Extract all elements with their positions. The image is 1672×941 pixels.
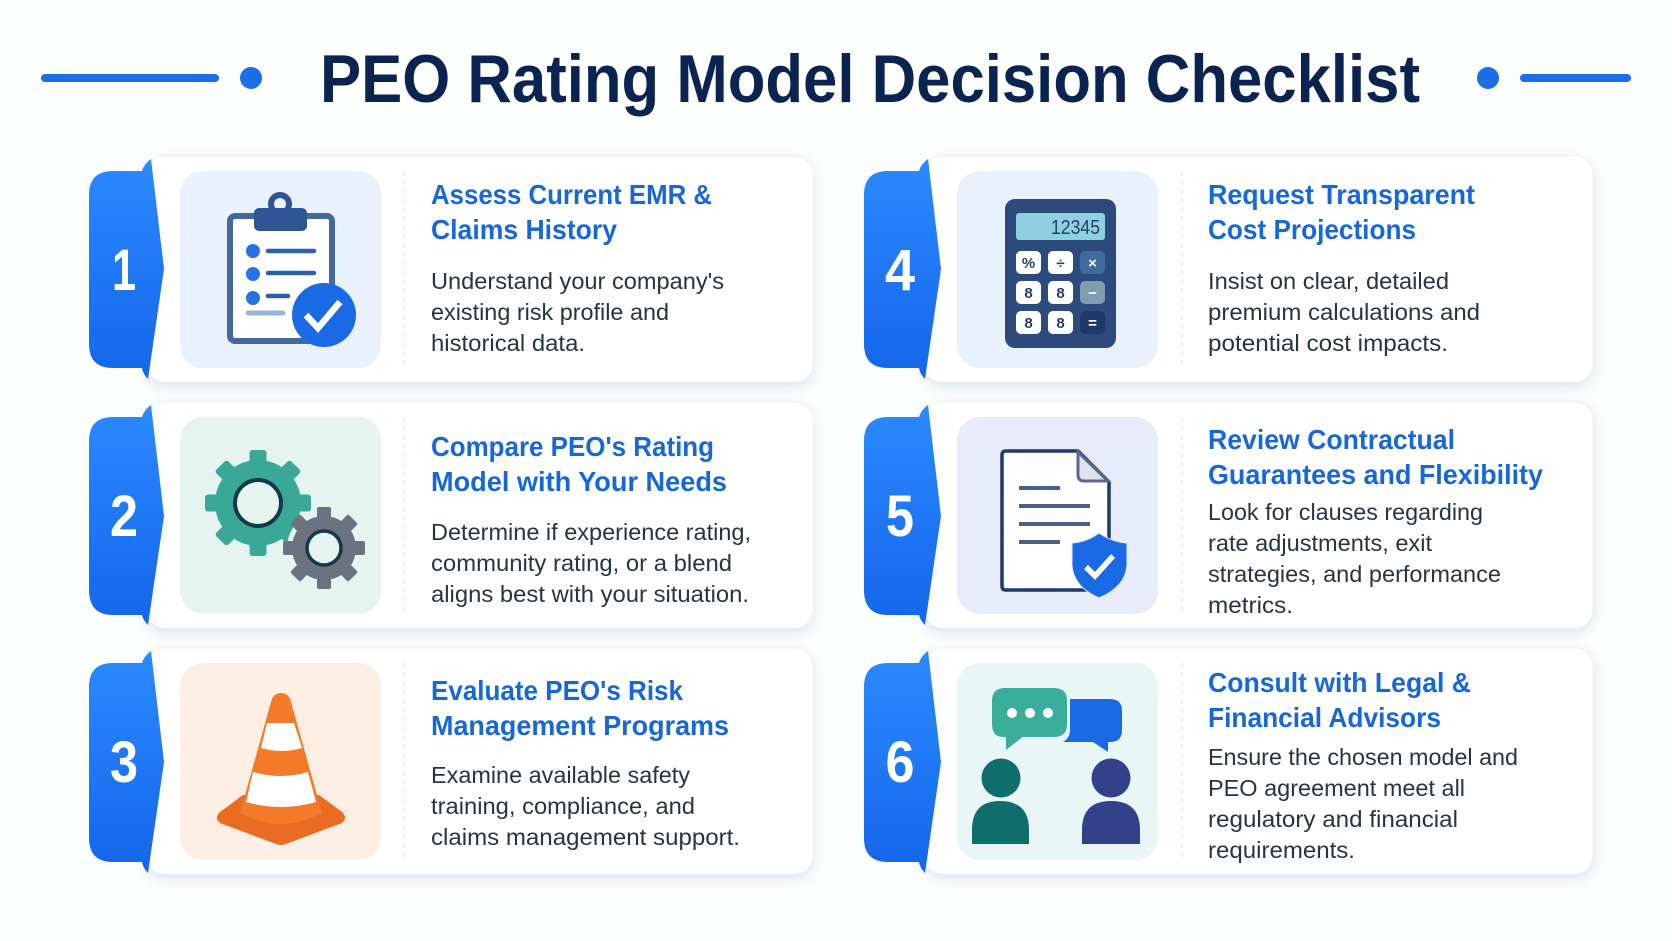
text: step 1: [431, 179, 724, 356]
icon: calculator: ×: [1088, 255, 1097, 272]
number tab 4: 4: [885, 238, 915, 303]
icon: document with shield: [957, 417, 1158, 614]
text: step 2: Model with Your Needs: [431, 466, 727, 497]
text: step 3: Examine available safety: [431, 762, 691, 788]
text: step 1: Assess Current EMR &: [431, 179, 712, 210]
icon: calculator: ÷: [1056, 255, 1065, 272]
text: step 5: Review Contractual: [1208, 424, 1455, 455]
text: step 4: premium calculations and: [1208, 299, 1480, 325]
text: step 3: training, compliance, and: [431, 793, 695, 819]
icon: gears: [180, 417, 381, 614]
text: step 5: rate adjustments, exit: [1208, 530, 1433, 556]
text: step 5: [1208, 424, 1543, 618]
text: step 6: regulatory and financial: [1208, 806, 1458, 832]
text: step 6: PEO agreement meet all: [1208, 775, 1465, 801]
header decoration left: [41, 67, 262, 89]
text: step 3: [431, 675, 740, 850]
text: step 5: Guarantees and Flexibility: [1208, 459, 1543, 490]
icon: calculator: 8: [1056, 315, 1065, 332]
number tab 2: 2: [110, 484, 138, 549]
icon: calculator: 8: [1024, 315, 1033, 332]
text: step 3: claims management support.: [431, 824, 740, 850]
number tab 6: [864, 651, 941, 873]
icon: calculator: 8: [1024, 285, 1033, 302]
text: step 4: potential cost impacts.: [1208, 330, 1448, 356]
panel: step 1: [89, 156, 813, 382]
icon: calculator: [957, 171, 1158, 368]
number tab 1: 1: [112, 238, 136, 303]
text: step 5: metrics.: [1208, 592, 1293, 618]
text: step 6: Financial Advisors: [1208, 702, 1441, 733]
number tab 2: [89, 405, 164, 625]
text: step 2: community rating, or a blend: [431, 550, 732, 576]
number tab 1: [89, 159, 164, 379]
text: step 3: Management Programs: [431, 710, 729, 741]
panel: step 3: [89, 648, 813, 874]
text: step 2: aligns best with your situation.: [431, 581, 749, 607]
text: step 4: Insist on clear, detailed: [1208, 268, 1449, 294]
number tab 5: 5: [886, 484, 914, 549]
text: step 6: [1208, 667, 1518, 863]
icon: calculator: −: [1088, 285, 1097, 302]
text: step 2: [431, 431, 751, 607]
number tab 4: [864, 159, 941, 379]
text: step 4: Request Transparent: [1208, 179, 1475, 210]
number tab 3: 3: [110, 730, 138, 795]
icon: calculator: 8: [1056, 285, 1065, 302]
text: step 5: strategies, and performance: [1208, 561, 1501, 587]
text: step 2: Determine if experience rating,: [431, 519, 751, 545]
panel: step 6: [864, 648, 1593, 874]
text: step 3: Evaluate PEO's Risk: [431, 675, 683, 706]
text: step 1: historical data.: [431, 330, 585, 356]
text: step 5: Look for clauses regarding: [1208, 499, 1483, 525]
panel: step 5: [864, 402, 1593, 628]
icon: calculator: 12345: [1051, 217, 1100, 239]
text: step 6: Consult with Legal &: [1208, 667, 1471, 698]
icon: two people talking: [957, 663, 1158, 860]
icon: clipboard: [180, 171, 381, 368]
text: step 4: Cost Projections: [1208, 214, 1416, 245]
text: step 1: Claims History: [431, 214, 617, 245]
number tab 6: 6: [886, 730, 914, 795]
panel: step 2: [89, 402, 813, 628]
header decoration right: [1477, 67, 1631, 89]
icon: calculator: =: [1088, 315, 1097, 332]
text: step 6: Ensure the chosen model and: [1208, 744, 1518, 770]
number tab 5: [864, 405, 941, 625]
icon: calculator: %: [1022, 255, 1035, 272]
title: PEO Rating Model Decision Checklist: [320, 41, 1420, 117]
text: step 1: existing risk profile and: [431, 299, 669, 325]
text: step 4: [1208, 179, 1480, 356]
text: step 2: Compare PEO's Rating: [431, 431, 714, 462]
text: step 1: Understand your company's: [431, 268, 724, 294]
number tab 3: [89, 651, 164, 873]
text: step 6: requirements.: [1208, 837, 1355, 863]
icon: traffic cone: [180, 663, 381, 860]
panel: step 4: [864, 156, 1593, 382]
